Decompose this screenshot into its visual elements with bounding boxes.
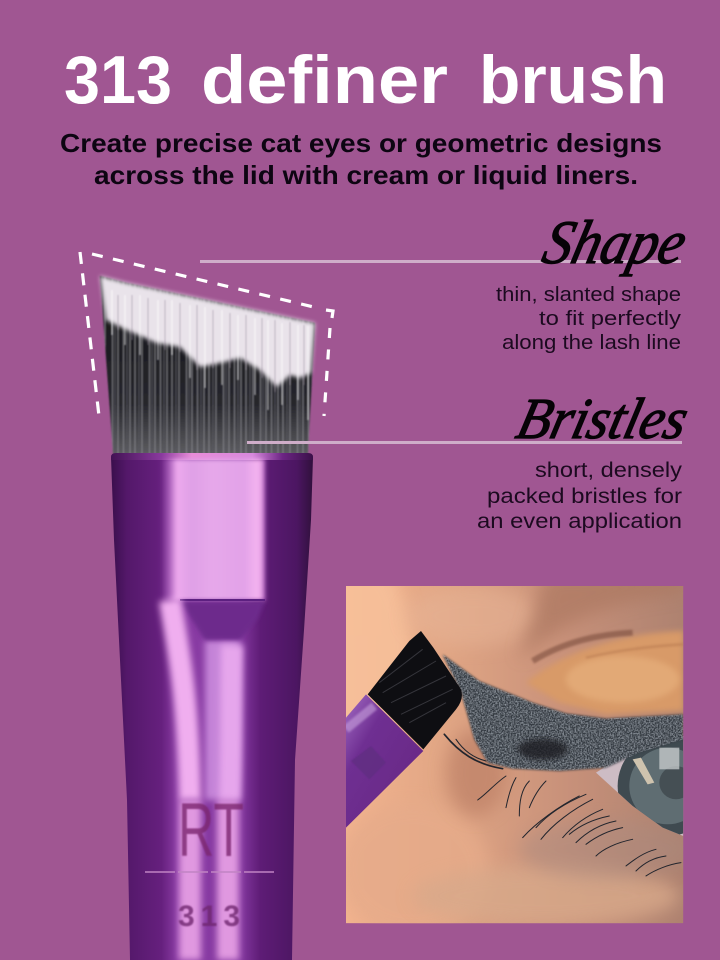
white bristle tips: [100, 276, 315, 387]
callout: shape: [200, 208, 694, 354]
handle centre glow: [205, 640, 240, 800]
subtitle: Create precise cat eyes or geometric designs: [60, 128, 662, 158]
title: 313: [64, 42, 172, 118]
description: [477, 459, 683, 533]
eyeliner: [443, 654, 683, 771]
photo brush bristles: [368, 631, 462, 749]
description: packed bristles for: [487, 485, 682, 508]
description: [496, 284, 681, 354]
lashes: [444, 734, 681, 876]
leader line: [247, 441, 682, 444]
script heading: Shape: Shape: [537, 208, 694, 277]
script heading: Bristles: Bristles: [511, 387, 695, 451]
dashed shape outline: [80, 252, 333, 416]
leader line: [200, 260, 681, 263]
description: thin, slanted shape: [496, 284, 681, 306]
collar rim: [111, 453, 313, 460]
description: an even application: [477, 510, 682, 533]
title: [64, 42, 667, 118]
eyeshadow: [526, 631, 683, 714]
handle notch shadow: [180, 601, 265, 640]
upper lid shade: [520, 586, 675, 652]
eyelid crease: [533, 633, 633, 661]
handle light streaks: [170, 600, 232, 960]
callout: bristles: [247, 387, 695, 533]
subtitle: across the lid with cream or liquid liners.: [94, 160, 638, 190]
description: short, densely: [535, 459, 683, 482]
handle flat highlight: [160, 459, 265, 601]
brush illustration: [80, 252, 333, 960]
bristles: [100, 276, 315, 454]
RT logo: RT: [178, 788, 244, 873]
model number: 313: [178, 900, 240, 933]
title: definer: [201, 42, 448, 118]
description: along the lash line: [502, 332, 681, 354]
skin: [346, 586, 683, 923]
photo brush ferrule: [346, 694, 423, 828]
photo: brush applying eyeliner: [346, 586, 684, 924]
eye: [596, 736, 684, 836]
description: to fit perfectly: [539, 308, 681, 330]
subtitle: [60, 128, 662, 190]
title: brush: [479, 42, 667, 118]
handle: [111, 453, 313, 960]
